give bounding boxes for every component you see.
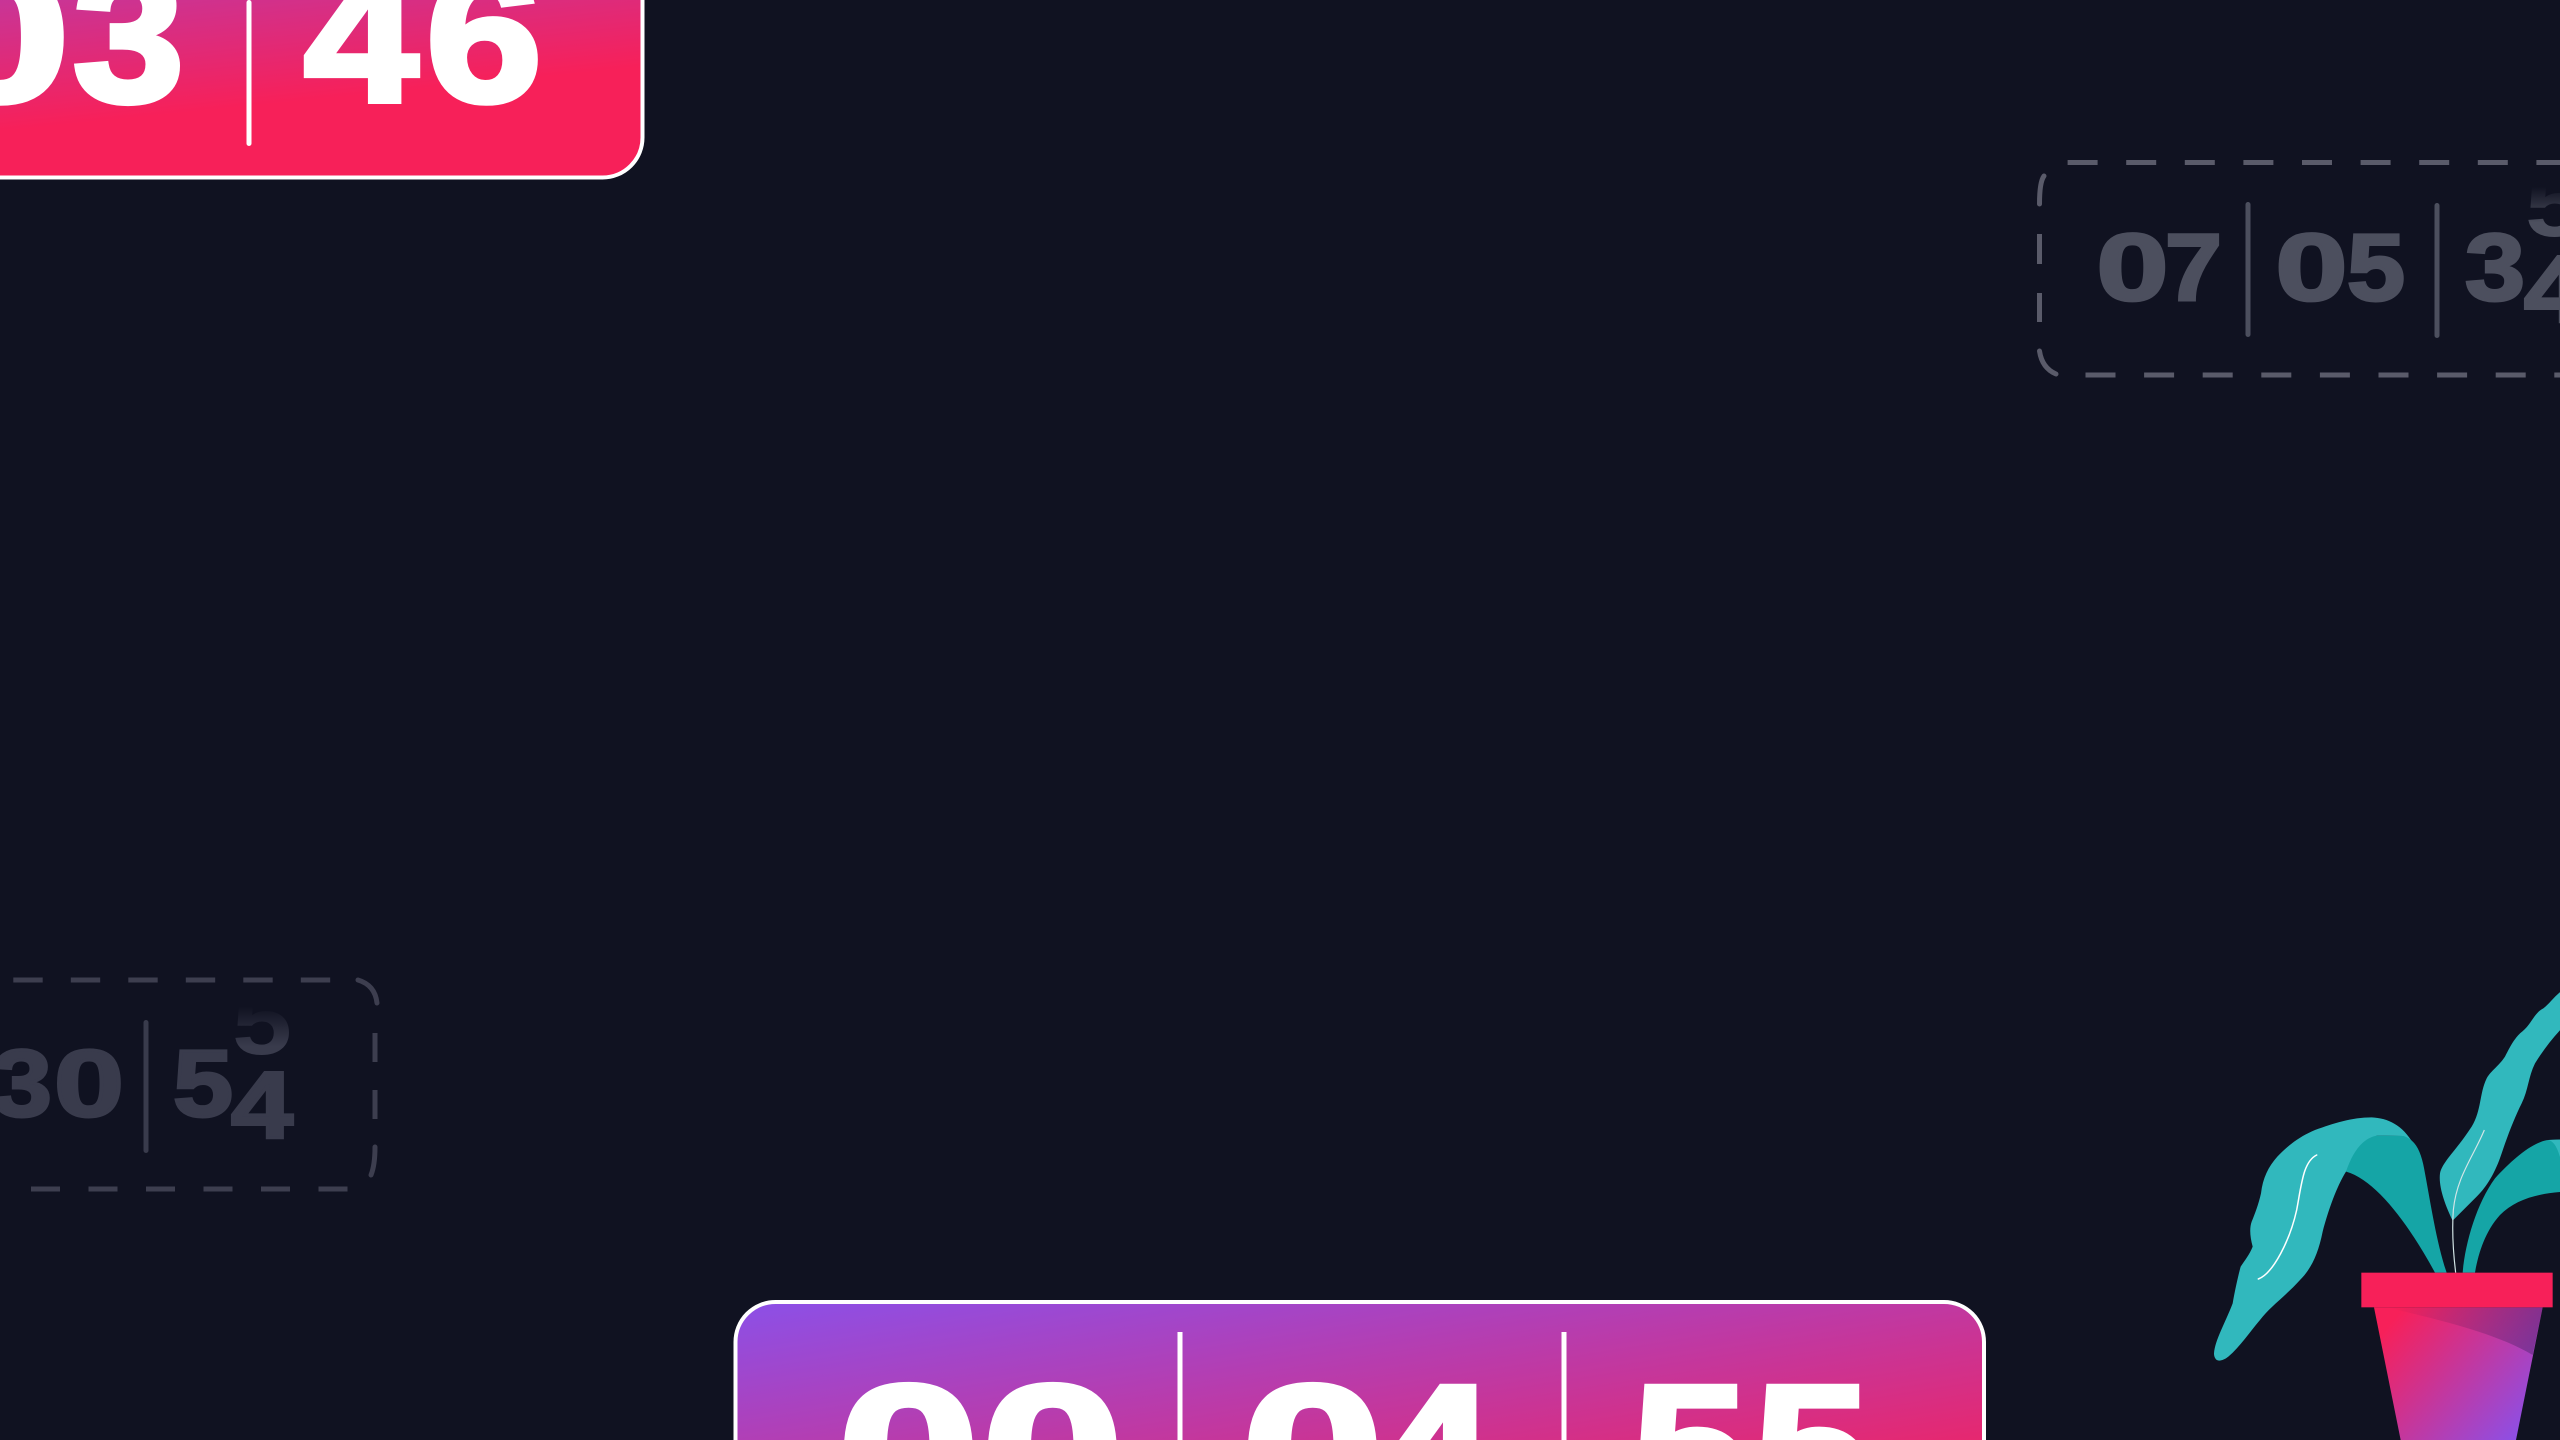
digits: 03	[0, 0, 184, 141]
panel: bottom timer card	[736, 1302, 1984, 1440]
pot rim	[2361, 1273, 2553, 1307]
rolling digits: 5 over 4: 4	[231, 1053, 293, 1159]
divider	[246, 0, 252, 146]
divider	[144, 1020, 148, 1153]
digits: 07 05 3: 7	[2165, 215, 2222, 321]
digits: 55	[1632, 1348, 1870, 1440]
digits: 07 05 3: 3	[2465, 215, 2525, 321]
digits: 07 05 3: 5	[2347, 215, 2405, 321]
digits: 46	[304, 0, 542, 141]
pot body	[2374, 1307, 2543, 1440]
dividers	[1178, 1332, 1566, 1440]
left leaf	[2214, 1117, 2447, 1361]
digits: 00	[838, 1348, 1123, 1440]
digits: 07 05 3	[2096, 215, 2525, 321]
rolling digits: 5 over 4: 5	[232, 969, 292, 1075]
rolling digits: 5 over 4	[2524, 192, 2560, 324]
middle leaf	[2440, 988, 2560, 1273]
right leaf	[2463, 1139, 2560, 1273]
panel: left ghost timer	[0, 969, 377, 1189]
dividers	[2246, 202, 2440, 338]
digits: 30 5: 0	[54, 1031, 124, 1137]
icon: potted plant	[2214, 988, 2560, 1440]
dashed outline	[13, 980, 377, 1189]
dashed outline	[2040, 162, 2560, 375]
digits: 04	[1242, 1348, 1493, 1440]
digits: 30 5: 5	[173, 1031, 233, 1137]
panel: top-right ghost timer	[2040, 151, 2560, 375]
panel: top-left timer card	[0, 0, 642, 178]
rolling digits: 5 over 4	[231, 1014, 294, 1140]
digits: 07 05 3: 0	[2276, 215, 2348, 321]
digits: 07 05 3: 0	[2096, 215, 2168, 321]
digits: 30 5	[0, 1031, 233, 1137]
